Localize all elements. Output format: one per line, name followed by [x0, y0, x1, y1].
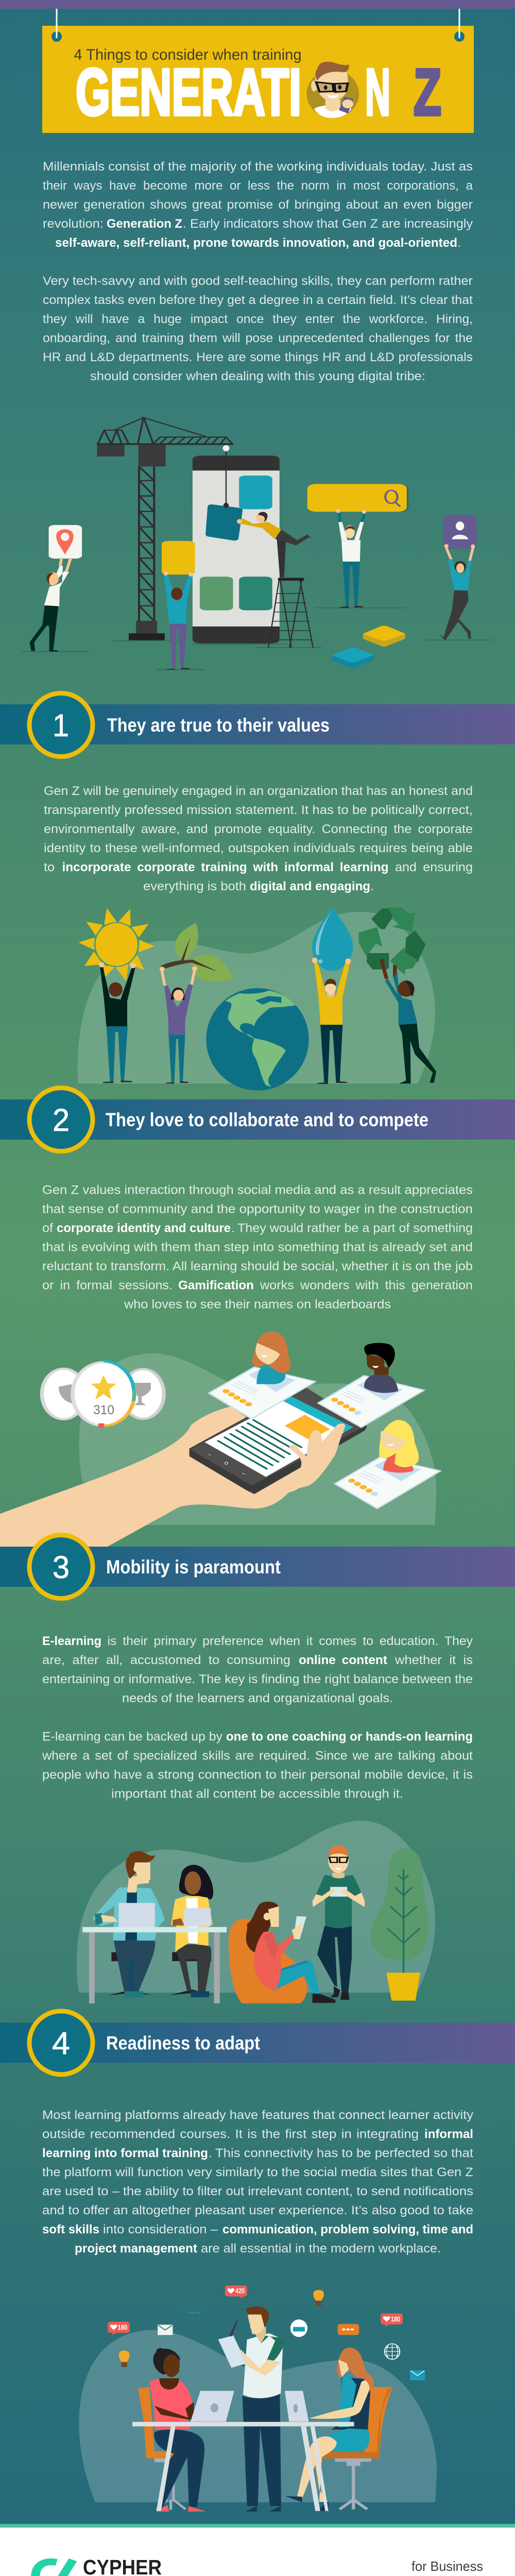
section header 2: 2 — [53, 1103, 70, 1138]
plant — [371, 1848, 428, 2001]
section header 2 — [0, 1088, 515, 1151]
section 3 text: online content — [299, 1653, 387, 1667]
section 4 text: . — [209, 2146, 212, 2160]
social icons — [108, 2285, 425, 2380]
like counters: 420 — [235, 2286, 245, 2295]
like counters: 180 — [391, 2315, 400, 2323]
section 3 text: entertaining or informative. The key is finding the right balance between the — [42, 1672, 473, 1686]
section header 1: They are true to their values — [107, 715, 330, 736]
right chair — [322, 2387, 392, 2509]
for business: for Business — [411, 2558, 483, 2574]
section 3 text: people who have a strong connection to their personal mobile device, it is — [42, 1768, 473, 1782]
section 2 text: that sense of community and the opportunity to wager in the construction — [42, 1202, 473, 1216]
top purple bar — [0, 0, 515, 9]
standing man with glasses — [313, 1845, 365, 2000]
section 4 text: informal — [424, 2127, 473, 2141]
person holding location pin — [30, 525, 82, 652]
profile card: dark hair — [318, 1343, 424, 1428]
section 2 text: that is evolving with them than step into something that is already set and — [42, 1241, 473, 1254]
illustration: team meeting around a table — [79, 2285, 437, 2512]
section 3 text: important that all content be accessible through it. — [111, 1787, 403, 1801]
isometric yellow tile — [363, 626, 405, 647]
standing man — [218, 2307, 284, 2512]
person holding sun — [99, 962, 136, 1083]
banner subtitle: 4 Things to consider when training — [74, 46, 302, 63]
section 2 text: or in formal sessions. — [42, 1279, 173, 1292]
section 1 text — [44, 784, 473, 893]
woman in yellow cardigan — [170, 1865, 214, 1997]
banner word: generation: N — [365, 56, 390, 129]
section 2 text: They would rather be a part of something — [237, 1221, 473, 1235]
section 4 text: This connectivity has to be perfected so that — [215, 2146, 473, 2160]
section 3 text: whether it is — [394, 1653, 473, 1667]
section 2 text: reluctant to transform. All learning should be social, whether it is on the job — [42, 1259, 473, 1274]
intro text: . — [457, 236, 461, 250]
intro text: Generation Z — [107, 217, 182, 231]
section 3 text: is their primary preference when it comes to education. They — [107, 1634, 473, 1648]
seated woman right — [285, 2347, 374, 2511]
like counters: 180 — [117, 2323, 128, 2331]
section 1 text: incorporate corporate training with informal learning — [62, 860, 388, 874]
person holding water drop — [312, 907, 353, 1084]
section 4 text: communication, problem solving, time and — [222, 2223, 473, 2236]
banner letter Z: Z — [414, 56, 441, 129]
section 1 text: identity to these well-informed, outspoken individuals requires being able — [44, 841, 473, 855]
section 1 text: to — [44, 860, 55, 874]
intro text: . — [183, 217, 186, 231]
intro text: newer generation shows great promise of bringing about an even bigger — [43, 198, 473, 212]
arm and hand — [0, 1406, 312, 1547]
intro text: complex tasks even before they get a degree in a certain field. It’s clear that — [43, 293, 473, 307]
intro text — [43, 160, 473, 383]
left chair — [138, 2387, 185, 2510]
intro text: Millennials consist of the majority of the working individuals today. Just as — [43, 160, 473, 174]
section 1 text: . — [370, 879, 374, 893]
intro text: should consider when dealing with this young digital tribe: — [90, 369, 425, 383]
section 3 text: needs of the learners and organizational goals. — [122, 1691, 393, 1705]
woman holding profile card — [439, 515, 476, 640]
section 2 text: of — [42, 1221, 53, 1235]
person holding search bar — [307, 484, 408, 608]
section 2 text: who loves to see their names on leaderboards — [124, 1297, 391, 1312]
recycling symbol — [359, 908, 426, 975]
section 2 text: . — [231, 1221, 235, 1235]
section 4 text: are used to – the ability to filter out irrelevant content, to send notifications — [42, 2184, 473, 2198]
badge: star — [73, 1361, 134, 1426]
section header 4: Readiness to adapt — [106, 2032, 260, 2054]
section 1 text: digital and engaging — [250, 879, 370, 893]
person holding leaves — [160, 966, 197, 1083]
section header 3: Mobility is paramount — [106, 1556, 281, 1578]
section header 2: They love to collaborate and to compete — [106, 1109, 428, 1130]
section 2 text: Gen Z values interaction through social media and as a result appreciates — [42, 1183, 473, 1197]
profile card: blonde hair — [335, 1420, 441, 1509]
fingers over phone — [289, 1423, 346, 1490]
section 3 text — [42, 1634, 473, 1801]
like counters — [117, 2286, 400, 2331]
section header 4: 4 — [52, 2026, 70, 2061]
leaves and branch — [161, 923, 234, 982]
section 3 text: one to one coaching or hands-on learning — [226, 1730, 473, 1743]
section 1 text: and ensuring — [395, 860, 473, 874]
profile card: red hair — [209, 1331, 316, 1419]
background blob — [79, 2330, 437, 2502]
section 4 text: into consideration – — [103, 2223, 218, 2236]
isometric blue tile — [332, 648, 374, 669]
intro text: they will have a huge impact once they enter the workforce. Hiring, — [43, 312, 473, 326]
section 4 text: learning into formal training — [42, 2146, 208, 2160]
desk — [82, 1927, 227, 2004]
intro text: revolution: — [43, 217, 104, 231]
beanbag and seated woman — [229, 1902, 335, 2004]
seated woman left — [149, 2348, 207, 2512]
worker on ladder — [237, 512, 313, 648]
intro text: onboarding, and training them will pose unprecedented challenges for the — [43, 331, 473, 345]
phone — [190, 1386, 367, 1494]
background blob — [78, 912, 435, 1083]
section 2 text — [42, 1183, 473, 1312]
section 2 text: Gamification — [178, 1279, 254, 1292]
section 4 text: are all essential in the modern workplace. — [201, 2242, 441, 2256]
section 3 text: E-learning can be backed up by — [42, 1730, 223, 1743]
giant phone — [193, 455, 280, 643]
person holding recycling symbol — [380, 959, 436, 1083]
badge: shield — [42, 1369, 85, 1419]
section 4 text: and to offer an altogether pleasant user experience. It’s also good to take — [42, 2204, 473, 2217]
section 1 text: everything is both — [143, 879, 246, 893]
section 3 text: are, after all, accustomed to consuming — [42, 1653, 290, 1667]
background blob — [77, 1821, 435, 1993]
section 2 text: corporate identity and culture — [57, 1221, 231, 1235]
illustration: team on mobile devices — [77, 1821, 435, 2004]
intro text: Very tech-savvy and with good self-teaching skills, they can perform rather — [43, 274, 473, 288]
logo mark — [36, 2560, 82, 2576]
section 2 text: works wonders with this generation — [260, 1279, 473, 1292]
section 1 text: environmentally aware, and promote equality. Connecting the corporate — [44, 822, 473, 836]
footer — [0, 2524, 515, 2576]
section header 1: 1 — [53, 708, 69, 743]
intro text: self-aware, self-reliant, prone towards innovation, and goal-oriented — [55, 236, 457, 250]
section 4 text: Most learning platforms already have features that connect learner activity — [42, 2108, 474, 2122]
person holding yellow tile — [162, 541, 195, 670]
section 3 text: where a set of specialized skills are required. Since we are talking about — [42, 1749, 473, 1763]
section header 4 — [0, 2011, 515, 2074]
sun — [78, 908, 154, 981]
illustration: environmental values — [78, 907, 436, 1091]
section 4 text: the platform will function very similarly to the social media sites that Gen Z — [42, 2165, 473, 2179]
intro text: HR and L&D departments. Here are some things HR and L&D professionals — [43, 350, 473, 364]
section 4 text: soft skills — [42, 2223, 99, 2236]
section 4 text: outside recommended courses. It is the first step in integrating — [42, 2127, 419, 2141]
table — [132, 2422, 354, 2511]
section 1 text: transparently professed mission statement. It has to be politically correct, — [44, 803, 473, 817]
avatar: boy with glasses — [306, 62, 359, 118]
section header 1 — [0, 693, 515, 756]
title banner — [42, 9, 474, 133]
ground shadows — [22, 608, 492, 670]
badge score number: 310 — [93, 1403, 114, 1417]
crane hook and tile — [210, 445, 239, 538]
banner word: generation: GENERATI — [76, 56, 301, 129]
background blob — [79, 1353, 436, 1525]
section 1 text: Gen Z will be genuinely engaged in an organization that has an honest and — [44, 784, 473, 798]
section 4 text: project management — [75, 2242, 197, 2256]
laptops — [191, 2391, 309, 2421]
section header 3: 3 — [53, 1550, 70, 1585]
illustration: gamification on a mobile phone — [0, 1331, 441, 1547]
man at desk — [93, 1851, 165, 1997]
globe — [206, 988, 309, 1091]
section header 3 — [0, 1535, 515, 1598]
section 3 text: E-learning — [42, 1634, 101, 1648]
badge: trophy — [122, 1369, 164, 1419]
section 4 text — [42, 2108, 474, 2256]
intro text: their ways have become more or less the norm in most corporations, a — [43, 179, 473, 193]
crane — [97, 417, 233, 640]
illustration: building a mobile app with a crane — [22, 417, 492, 670]
intro text: Early indicators show that Gen Z are increasingly — [190, 217, 473, 231]
